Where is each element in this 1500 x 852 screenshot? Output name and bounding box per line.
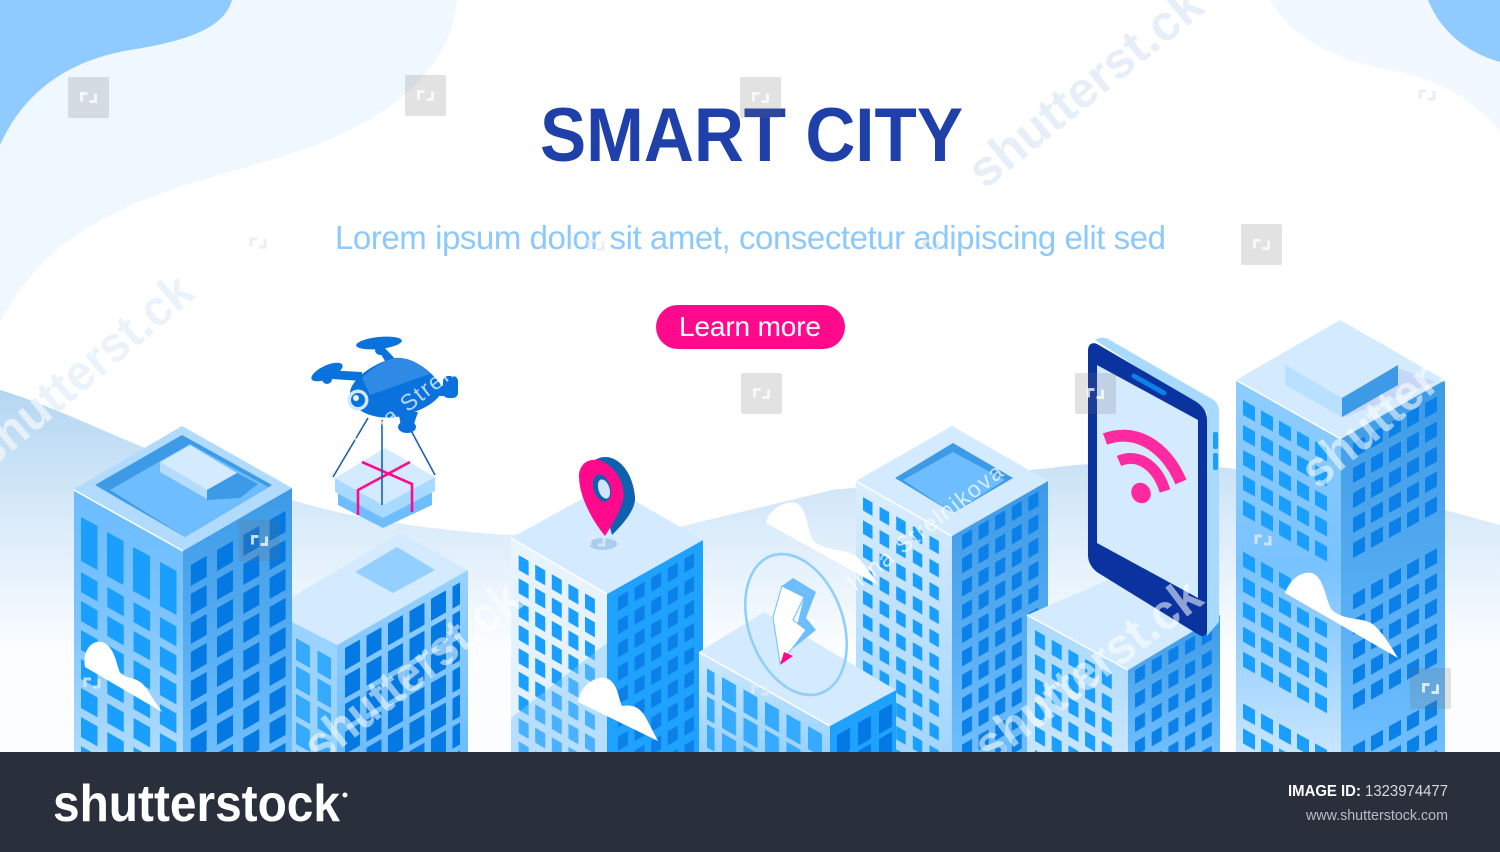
image id: IMAGE ID: 1323974477 (1288, 783, 1448, 800)
watermark text: shutterst.ck (963, 566, 1212, 774)
drone strings (333, 418, 435, 505)
watermark text: Irina Strelnikova (842, 458, 1008, 596)
icon: location pin (579, 457, 635, 550)
title: SMART CITY (540, 93, 963, 178)
building 2 (292, 533, 468, 752)
building 6 roof (1027, 575, 1220, 670)
building 4 roof (699, 612, 896, 726)
background blob: top right dark (1428, 0, 1500, 62)
background blob: top left light (0, 0, 457, 322)
phone screen (1097, 365, 1198, 598)
cloud: left (84, 642, 162, 712)
building 3 right face (607, 540, 703, 752)
building 1 roof (74, 426, 292, 551)
icon: energy ring with lightning bolt (727, 540, 865, 709)
watermark text: Irina Strelnikova (347, 316, 513, 454)
website: www.shutterstock.com (1305, 808, 1448, 824)
building 3 roof (511, 485, 703, 594)
icon: smartphone with wifi (1088, 338, 1219, 636)
phone speaker (1134, 376, 1164, 393)
watermark squares (68, 75, 1451, 709)
building 1 left face (74, 490, 183, 752)
button: learn more (656, 305, 845, 349)
building 6 right face (1128, 615, 1220, 752)
building 1 right face (183, 488, 292, 752)
building 5 roof (856, 426, 1048, 536)
drone body (350, 358, 443, 418)
watermark text: shutterst.ck (292, 569, 532, 774)
cloud: right (1285, 573, 1398, 658)
building 4 left face (699, 652, 830, 752)
building 6 left face (1027, 615, 1128, 752)
cloud: centre (766, 502, 878, 585)
wifi symbol (1105, 436, 1181, 507)
background hills (0, 390, 1500, 752)
footer logo: shutterstock (53, 775, 340, 833)
building 3 (511, 485, 703, 752)
building 2 right face (337, 570, 468, 752)
building 7 (1236, 320, 1445, 752)
building 1 (74, 426, 292, 752)
subtitle: Lorem ipsum dolor sit amet, consectetur adipiscing elit sed (335, 219, 1166, 256)
parcel (335, 448, 435, 528)
footer bar (0, 752, 1500, 852)
building 7 roof (1236, 320, 1445, 439)
background blob: top left dark (0, 0, 232, 145)
background blob: top right light (1270, 0, 1500, 132)
drone with parcel (309, 335, 458, 528)
building 4 right face (830, 690, 896, 752)
button: learn more: Learn more (679, 311, 821, 342)
building 5 (856, 426, 1048, 752)
building 5 right face (952, 481, 1048, 752)
building 2 roof (292, 533, 468, 645)
drone camera (348, 390, 368, 410)
building 5 left face (856, 481, 952, 752)
building 4 (699, 612, 896, 752)
building 7 right face (1341, 380, 1445, 752)
building 7 left face (1236, 380, 1341, 752)
building 3 left face (511, 538, 607, 752)
building 6 (1027, 575, 1220, 752)
phone front (1088, 343, 1207, 636)
drone arms and rotors (309, 335, 458, 433)
building 2 left face (292, 597, 337, 752)
cloud: middle (578, 678, 658, 741)
phone side (1095, 338, 1219, 636)
